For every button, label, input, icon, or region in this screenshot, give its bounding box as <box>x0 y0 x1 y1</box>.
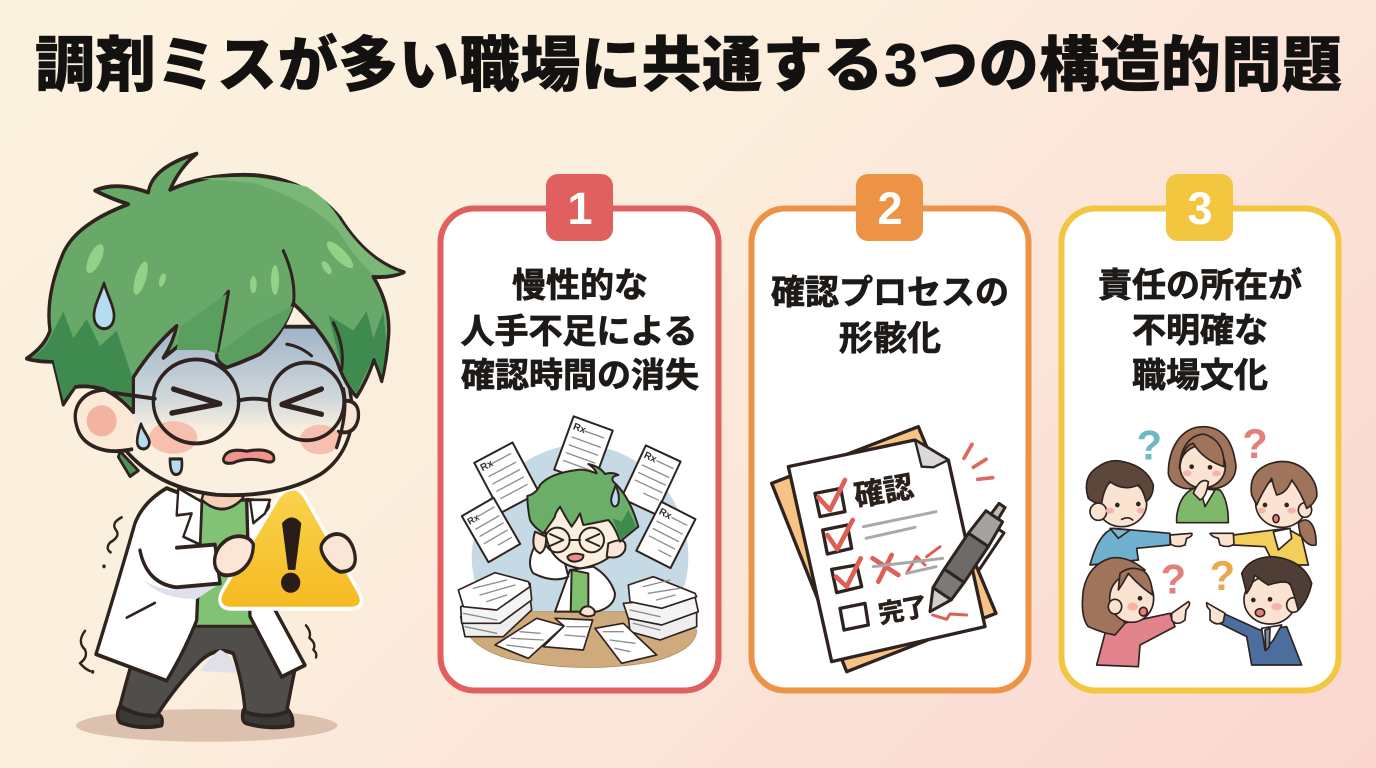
panel 1 heading: 人手不足による <box>461 313 697 351</box>
panel 1 heading: 慢性的な <box>512 267 648 305</box>
panel 2 heading <box>771 274 1009 358</box>
badge 3: 3 <box>1187 183 1213 234</box>
person: top centre thinking <box>1168 427 1236 523</box>
sweat drops <box>94 283 182 475</box>
question marks: ? <box>1242 420 1268 467</box>
illustration: checklist and pen <box>772 427 1016 672</box>
illustration: overwhelmed pharmacist with prescriptions: Rx <box>642 450 659 466</box>
illustration: checklist and pen: 完了 <box>876 591 930 629</box>
illustration: five coworkers pointing at each other <box>1082 420 1317 667</box>
small pharmacist <box>527 464 638 616</box>
illustration: overwhelmed pharmacist with prescriptions <box>458 416 698 668</box>
illustration: worried pharmacist holding warning sign <box>27 154 404 742</box>
illustration: overwhelmed pharmacist with prescriptions: Rx <box>466 512 482 527</box>
hair <box>27 154 404 476</box>
question marks <box>1137 420 1268 602</box>
panel 2 heading: 確認プロセスの <box>771 274 1009 312</box>
title: 調剤ミスが多い職場に共通する3つの構造的問題 <box>35 32 1342 99</box>
face <box>120 327 353 495</box>
illustration: overwhelmed pharmacist with prescriptions: Rx <box>657 506 674 522</box>
illustration: overwhelmed pharmacist with prescriptions: Rx <box>479 458 496 474</box>
illustration: overwhelmed pharmacist with prescriptions: Rx <box>571 422 588 436</box>
question marks: ? <box>1161 555 1186 602</box>
question marks: ? <box>1137 421 1162 468</box>
panel 1 heading: 確認時間の消失 <box>461 357 699 395</box>
badge 3 <box>1166 174 1233 241</box>
person: bottom right navy <box>1207 557 1312 665</box>
illustration: checklist and pen: 確認 <box>851 471 916 514</box>
panel 2: formalised confirmation process <box>752 174 1028 690</box>
badge 2: 2 <box>877 183 903 234</box>
badge 1: 1 <box>567 183 593 234</box>
question marks: ? <box>1210 552 1235 599</box>
panel 3 heading: 不明確な <box>1132 312 1268 350</box>
panel 3 heading: 職場文化 <box>1132 357 1268 395</box>
person: bottom left pink <box>1082 558 1190 667</box>
panel 2 heading: 形骸化 <box>839 320 941 358</box>
sparks <box>964 444 993 479</box>
person: top left blue <box>1086 461 1192 565</box>
panel 3 heading <box>1098 266 1302 395</box>
badge 1 <box>546 174 613 241</box>
tremble marks <box>80 517 316 671</box>
warning triangle <box>220 488 361 609</box>
panel 3: unclear responsibility culture <box>1062 174 1338 690</box>
desk paper stacks <box>458 573 698 663</box>
glasses <box>113 359 345 447</box>
squeezed eyes and mouth <box>172 344 322 463</box>
person: top right yellow <box>1210 462 1317 565</box>
panel 1: chronic understaffing <box>440 174 718 690</box>
pen <box>920 499 1016 621</box>
panel 3 heading: 責任の所在が <box>1098 266 1302 305</box>
panel 1 heading <box>461 267 699 395</box>
badge 2 <box>856 174 923 241</box>
